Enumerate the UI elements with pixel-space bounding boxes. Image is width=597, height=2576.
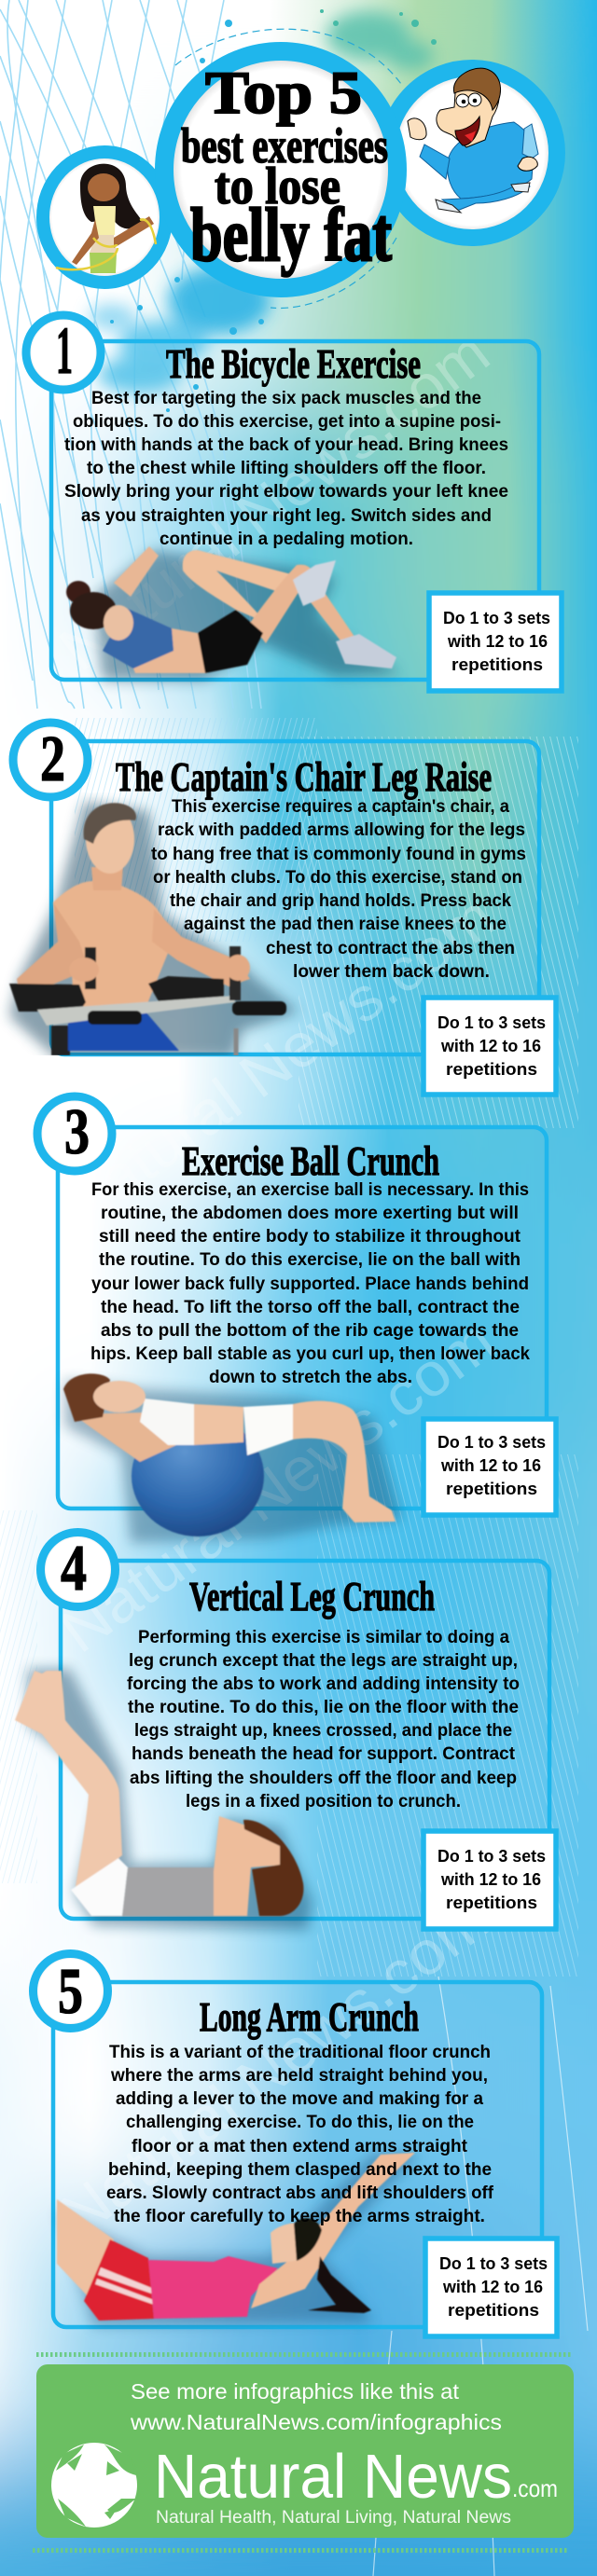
body text xyxy=(106,2043,494,2226)
watermarks: Natural News.com xyxy=(48,1305,507,1665)
callout: sets xyxy=(423,1831,556,1929)
logo wordmark: Natural News xyxy=(154,2442,512,2512)
number badge: 3 xyxy=(64,1096,90,1168)
body text: For this exercise, an exercise ball is necessary. In this xyxy=(91,1180,529,1200)
body text: abs to pull the bottom of the rib cage towards the xyxy=(101,1321,519,1341)
number badge xyxy=(26,313,101,390)
body text: the routine. To do this exercise, lie on the ball with xyxy=(99,1250,521,1270)
footer call to action xyxy=(130,2379,502,2434)
callout: sets: repetitions xyxy=(446,1893,537,1912)
body text: hands beneath the head for support. Contract xyxy=(132,1744,516,1764)
panel: long arm crunch xyxy=(34,1954,557,2336)
body text: or health clubs. To do this exercise, stand on xyxy=(153,868,522,888)
body text: hips. Keep ball stable as you curl up, then lower back xyxy=(90,1344,530,1364)
footer call to action: www.NaturalNews.com/infographics xyxy=(130,2410,502,2434)
icon: globe logo xyxy=(51,2443,137,2528)
body text: as you straighten your right leg. Switch sides and xyxy=(81,506,492,526)
panel frame xyxy=(53,1982,542,2327)
panel frame xyxy=(51,341,539,680)
number badge xyxy=(41,1533,116,1607)
body text: This exercise requires a captain's chair, a xyxy=(172,797,509,817)
body text: against the pad then raise knees to the xyxy=(184,915,507,934)
badge: woman with measuring tape xyxy=(43,152,166,282)
body text: the floor carefully to keep the arms straight. xyxy=(114,2207,485,2226)
body text: to hang free that is commonly found in gyms xyxy=(151,845,526,864)
callout: sets: with 12 to 16 xyxy=(440,1869,541,1889)
tagline: Natural Health, Natural Living, Natural News xyxy=(156,2508,511,2528)
badge: title xyxy=(164,51,397,288)
panel frame xyxy=(61,1561,549,1919)
heading: Long Arm Crunch xyxy=(200,1994,419,2040)
body text: ears. Slowly contract abs and lift shoulders off xyxy=(106,2183,494,2203)
title: to lose xyxy=(215,158,340,215)
body text: Best for targeting the six pack muscles and the xyxy=(91,389,481,408)
body text: challenging exercise. To do this, lie on the xyxy=(126,2113,474,2132)
body text xyxy=(90,1180,530,1387)
callout: sets: with 12 to 16 xyxy=(447,631,548,651)
panel frame xyxy=(51,741,539,1054)
body text: still need the entire body to stabilize it throughout xyxy=(99,1227,521,1247)
body text: forcing the abs to work and adding intensity to xyxy=(127,1674,520,1694)
body text: the head. To lift the torso off the ball, contract the xyxy=(101,1298,520,1317)
panel: footer xyxy=(36,2364,574,2538)
callout: sets: with 12 to 16 xyxy=(442,2277,543,2296)
fine line texture xyxy=(0,718,588,2576)
callout: sets: repetitions xyxy=(448,2300,539,2320)
number badge xyxy=(13,723,88,797)
callout: sets: repetitions xyxy=(446,1059,537,1079)
callout: sets: repetitions xyxy=(446,1479,537,1498)
header badges xyxy=(43,51,557,288)
watermarks: Natural News.com xyxy=(47,317,502,683)
callout: sets xyxy=(423,1419,556,1515)
callout: sets: Do 1 to 3 sets xyxy=(437,1432,546,1452)
body text: routine, the abdomen does more exerting but will xyxy=(101,1204,519,1223)
callout: sets xyxy=(429,593,562,691)
background streak lines xyxy=(0,0,261,709)
panel: captain's chair xyxy=(9,723,556,1095)
body text: tion with hands at the back of your head. Bring knees xyxy=(64,435,508,455)
number badge xyxy=(34,1954,108,2029)
title: belly fat xyxy=(190,192,392,277)
body text: to the chest while lifting shoulders off the floor. xyxy=(87,459,486,478)
callout: sets: repetitions xyxy=(451,654,543,674)
body text: legs in a fixed position to crunch. xyxy=(186,1792,461,1811)
panel: vertical leg crunch xyxy=(15,1533,556,1930)
body text xyxy=(127,1628,520,1811)
body text: leg crunch except that the legs are straight up, xyxy=(129,1651,518,1671)
body text: legs straight up, knees crossed, and place the xyxy=(134,1721,512,1741)
callout: sets xyxy=(423,998,556,1095)
panel: bicycle exercise xyxy=(26,313,562,691)
photo: bicycle crunch xyxy=(66,546,401,681)
number badge xyxy=(37,1096,112,1171)
callout: sets: Do 1 to 3 sets xyxy=(443,608,550,627)
callout: sets xyxy=(425,2239,557,2336)
body text: lower them back down. xyxy=(293,962,490,982)
watermarks: Natural News.com xyxy=(47,1883,502,2250)
footer call to action: See more infographics like this at xyxy=(131,2379,460,2404)
heading: Exercise Ball Crunch xyxy=(182,1138,439,1184)
body text xyxy=(151,797,526,982)
body text: Slowly bring your right elbow towards your left knee xyxy=(64,482,508,502)
callout: sets: Do 1 to 3 sets xyxy=(437,1846,546,1866)
panel: exercise ball crunch xyxy=(37,1096,556,1543)
callout: sets: Do 1 to 3 sets xyxy=(437,1012,546,1032)
body text: the chair and grip hand holds. Press back xyxy=(170,891,511,911)
logo wordmark: .com xyxy=(512,2474,558,2502)
footer background xyxy=(36,2364,574,2538)
body text: abs lifting the shoulders off the floor and keep xyxy=(130,1769,517,1788)
body text: the routine. To do this, lie on the floor with the xyxy=(128,1698,519,1717)
callout: sets: Do 1 to 3 sets xyxy=(439,2253,548,2273)
body text: where the arms are held straight behind you, xyxy=(110,2066,488,2086)
body text: chest to contract the abs then xyxy=(266,939,515,958)
body text: rack with padded arms allowing for the legs xyxy=(158,820,525,840)
callout: sets: with 12 to 16 xyxy=(440,1455,541,1475)
body text: obliques. To do this exercise, get into a supine posi- xyxy=(73,412,501,432)
body text: floor or a mat then extend arms straight xyxy=(132,2137,468,2156)
badge: running cartoon man xyxy=(387,68,557,238)
heading: Vertical Leg Crunch xyxy=(189,1574,435,1619)
photo: legs up crunch xyxy=(15,1669,312,1930)
footer dotted rules xyxy=(33,2355,573,2551)
photo: woman on ball xyxy=(63,1373,401,1543)
paint splatter xyxy=(89,9,437,412)
number badge: 2 xyxy=(40,723,65,795)
callout: sets: with 12 to 16 xyxy=(440,1036,541,1055)
body text: your lower back fully supported. Place hands behind xyxy=(91,1274,529,1294)
title: Top 5 xyxy=(205,60,362,127)
number badge: 4 xyxy=(61,1533,87,1605)
body text: down to stretch the abs. xyxy=(209,1368,412,1387)
dashed arcs around title xyxy=(175,29,401,308)
number badge: 5 xyxy=(58,1956,83,2028)
panel frame xyxy=(58,1127,547,1508)
watermarks: Natural News.com xyxy=(48,881,507,1241)
body text: This is a variant of the traditional floor crunch xyxy=(109,2043,491,2062)
body text: adding a lever to the move and making for a xyxy=(116,2089,483,2109)
title: best exercises xyxy=(181,119,388,173)
photo: long arm crunch xyxy=(57,2153,420,2326)
body text: behind, keeping them clasped and next to the xyxy=(108,2160,492,2180)
body text xyxy=(64,389,508,549)
photo: man on captain's chair xyxy=(9,802,298,1058)
body text: continue in a pedaling motion. xyxy=(160,530,413,549)
title xyxy=(181,60,392,277)
body text: Performing this exercise is similar to doing a xyxy=(138,1628,509,1647)
heading: The Bicycle Exercise xyxy=(166,341,421,387)
number badge: 1 xyxy=(56,313,73,388)
watermarks xyxy=(47,317,507,2250)
